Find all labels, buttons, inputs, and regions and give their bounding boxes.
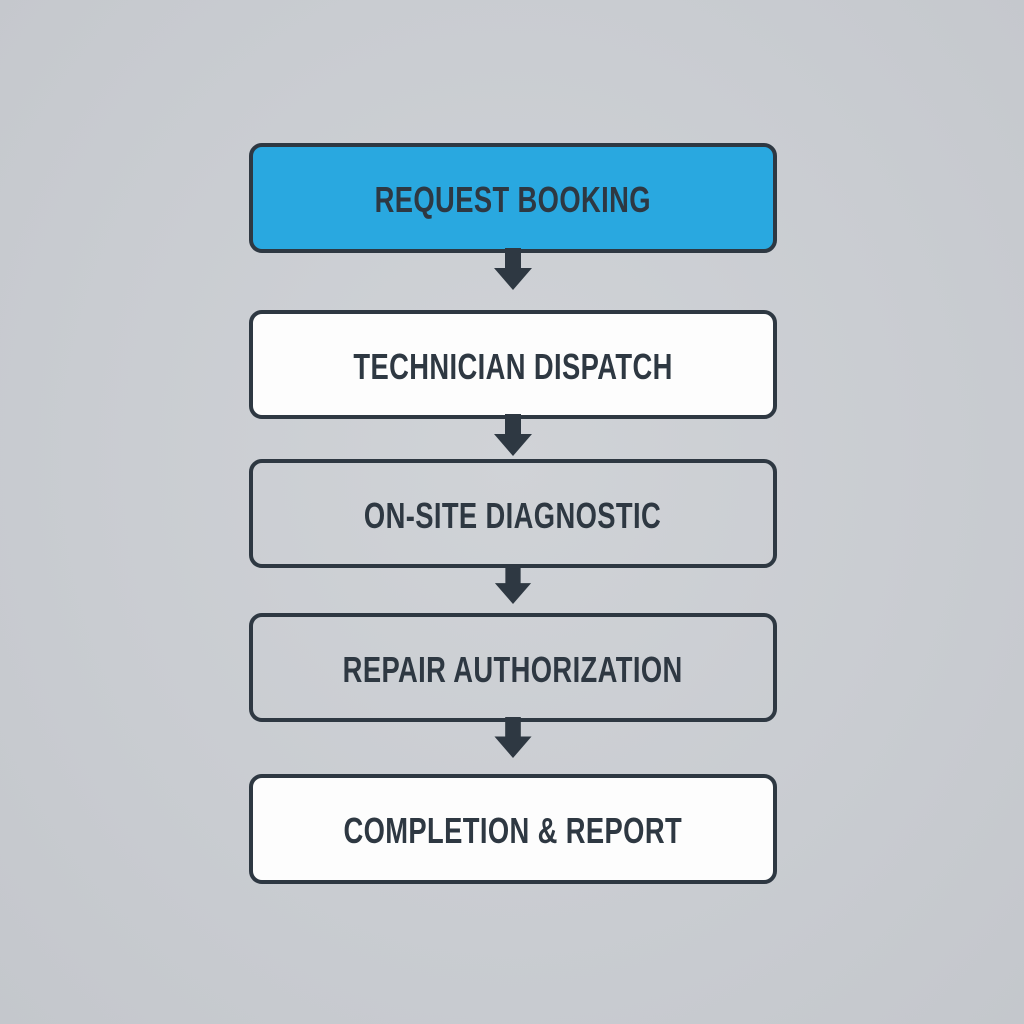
step 3: on-site diagnostic: ON-SITE DIAGNOSTIC [364, 494, 662, 536]
arrow 3 [495, 568, 531, 604]
step 1: request booking: REQUEST BOOKING [375, 179, 651, 220]
arrow 4 [494, 717, 532, 758]
arrow 1 [494, 248, 532, 290]
step 3: on-site diagnostic [249, 459, 777, 568]
step 2: technician dispatch: TECHNICIAN DISPATCH [353, 346, 673, 386]
step 1: request booking [249, 143, 777, 253]
arrow 2 [494, 414, 532, 456]
step 5: completion & report [249, 774, 777, 884]
step 4: repair authorization [249, 613, 777, 722]
step 5: completion & report: COMPLETION & REPORT [344, 810, 682, 851]
step 4: repair authorization: REPAIR AUTHORIZATION [343, 648, 683, 690]
step 2: technician dispatch [249, 310, 777, 419]
